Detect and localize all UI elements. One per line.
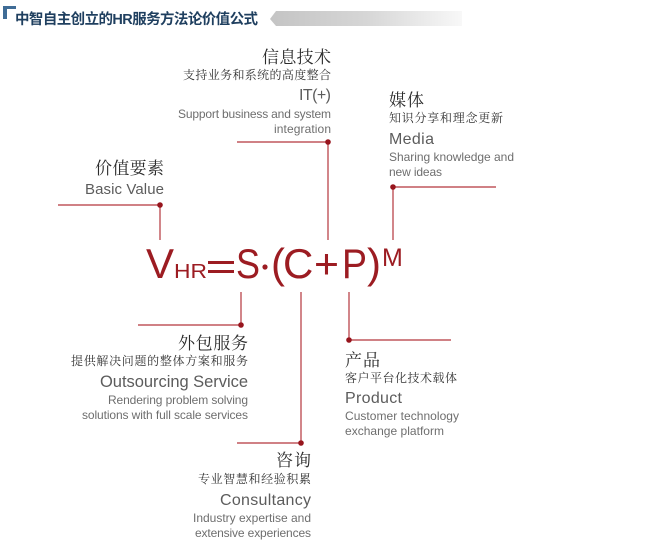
callout: IT: integration (274, 122, 331, 136)
connector: outsourcing (138, 292, 244, 328)
callout: product: exchange platform (345, 424, 444, 438)
callout: product: 客户平台化技术载体 (345, 370, 457, 385)
callout: media: 媒体 (389, 91, 424, 110)
connector: product (346, 292, 451, 343)
callout: IT: IT(+) (299, 87, 331, 104)
formula: S (236, 240, 260, 287)
header (3, 6, 462, 28)
connector: consultancy (237, 292, 304, 446)
formula: ) (367, 240, 381, 287)
callout: IT: Support business and system (178, 107, 331, 121)
callout: consultancy: Industry expertise and (193, 511, 311, 525)
connector: media (390, 184, 496, 240)
callout: outsourcing: solutions with full scale services (82, 408, 248, 422)
callout: basic value: Basic Value (85, 181, 164, 198)
formula: + (314, 240, 339, 287)
callout: product: Customer technology (345, 409, 459, 423)
callout: outsourcing: 外包服务 (178, 334, 248, 353)
formula (146, 240, 403, 287)
callout: media (389, 91, 514, 179)
formula: M (382, 244, 403, 272)
callout: consultancy: 咨询 (276, 451, 311, 470)
header gradient bar (270, 11, 462, 26)
callout: consultancy: extensive experiences (195, 526, 311, 540)
icon: corner bracket (3, 6, 16, 19)
connector: basic value (58, 202, 163, 240)
callout: outsourcing: Outsourcing Service (100, 373, 248, 391)
callout: consultancy: Consultancy (220, 492, 311, 509)
callout: outsourcing (71, 334, 248, 422)
formula: HR (174, 261, 207, 283)
callout: media: Media (389, 131, 434, 148)
callout: media: new ideas (389, 165, 442, 179)
callout: outsourcing: 提供解决问题的整体方案和服务 (71, 353, 248, 368)
callout: outsourcing: Rendering problem solving (108, 393, 248, 407)
callout: media: Sharing knowledge and (389, 150, 514, 164)
callout: basic value: 价值要素 (95, 159, 164, 178)
callout: consultancy (193, 451, 311, 540)
connector: IT (237, 139, 331, 240)
title: 中智自主创立的HR服务方法论价值公式 (15, 10, 258, 28)
callout: IT: 支持业务和系统的高度整合 (183, 67, 331, 82)
formula: C (283, 240, 313, 287)
callout: IT (178, 48, 331, 136)
callout: IT: 信息技术 (262, 48, 331, 67)
formula: P (342, 240, 367, 287)
callout: consultancy: 专业智慧和经验积累 (198, 471, 311, 486)
formula: ( (271, 240, 285, 287)
callout: product (345, 351, 459, 438)
callout: product: 产品 (345, 351, 380, 370)
callout: media: 知识分享和理念更新 (389, 110, 503, 125)
callout: basic value (85, 159, 164, 198)
formula: V (146, 240, 174, 287)
callout: product: Product (345, 390, 403, 407)
